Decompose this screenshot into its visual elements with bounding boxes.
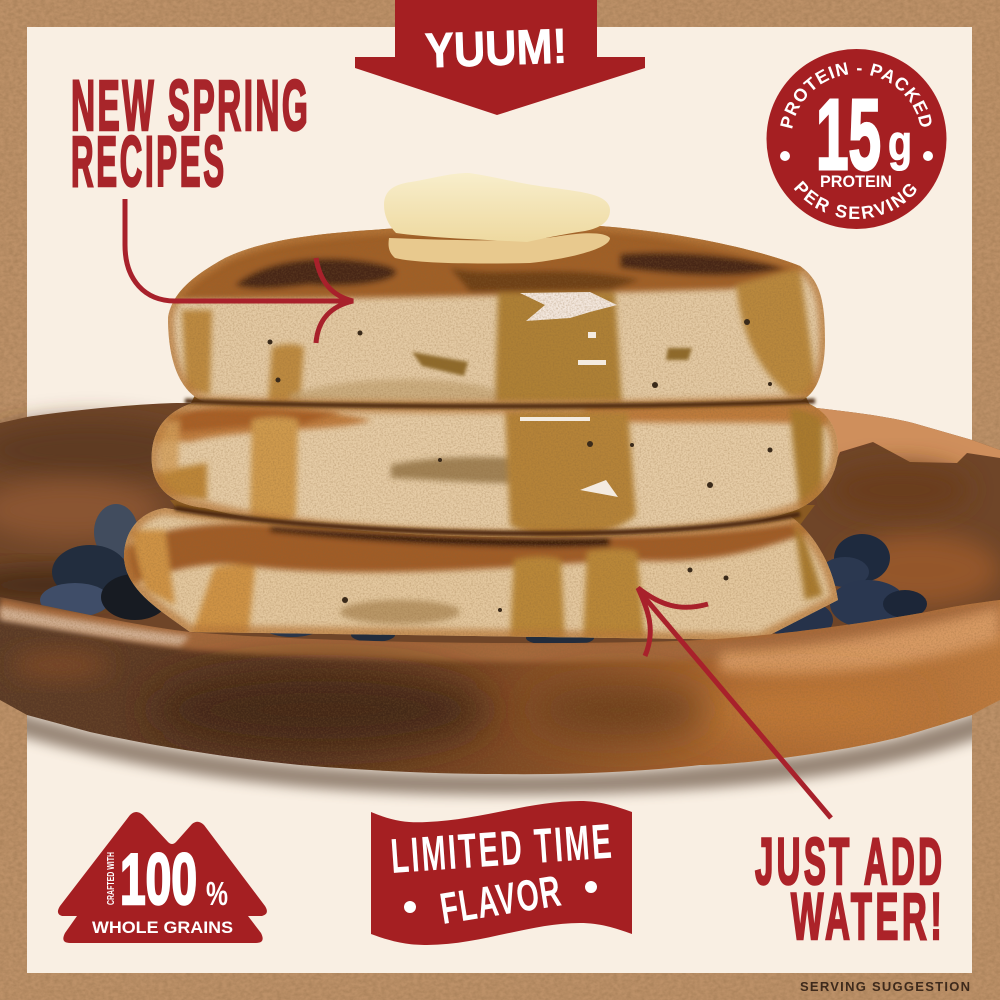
wooden plate back: [0, 403, 1000, 650]
heading: new spring recipes: NEW SPRING: [71, 66, 308, 145]
badge arc text bottom: PER SERVING: [794, 180, 916, 219]
banner line 2: FLAVOR: [437, 865, 564, 933]
crafted with: CRAFTED WITH: [105, 852, 117, 905]
badge number: 15: [816, 79, 881, 191]
butter pat: [384, 173, 610, 263]
callout: just add water: [755, 826, 942, 954]
whole grains: WHOLE GRAINS: [92, 919, 233, 937]
pancake seams: [175, 401, 815, 533]
footnote: serving suggestion: SERVING SUGGESTION: [800, 979, 970, 994]
top arrow banner: [355, 0, 645, 115]
pancake middle: [152, 402, 838, 538]
callout: just add water: WATER!: [791, 880, 942, 954]
plate shadow: [27, 715, 972, 804]
photo: pancakes on wooden plate: [0, 173, 1000, 780]
banner line 1: LIMITED TIME: [389, 813, 613, 884]
badge protein: PROTEIN: [820, 172, 892, 191]
badge: 100% whole grains: [58, 812, 267, 943]
100: 100: [120, 840, 197, 920]
heading: new spring recipes: RECIPES: [71, 121, 224, 202]
stack underlay: [170, 395, 815, 525]
pancake top: [168, 226, 825, 406]
banner: limited time flavor: [371, 801, 632, 945]
arrow: just add water to pancake: [638, 588, 831, 818]
wooden plate front rim: [0, 590, 1000, 780]
badge arc text top: PROTEIN - PACKED: [780, 62, 932, 128]
yuum text: YUUM!: [424, 20, 568, 78]
badge unit: g: [888, 115, 912, 171]
syrup highlights and poppy seeds: [268, 319, 772, 612]
pancake bottom: [124, 508, 838, 640]
heading: new spring recipes: [71, 66, 308, 202]
callout: just add water: JUST ADD: [755, 826, 942, 899]
blueberries: [40, 504, 927, 646]
percent: %: [206, 875, 228, 912]
badge: 15g protein: [766, 49, 946, 229]
arrow: new spring recipes to pancake: [125, 199, 353, 343]
